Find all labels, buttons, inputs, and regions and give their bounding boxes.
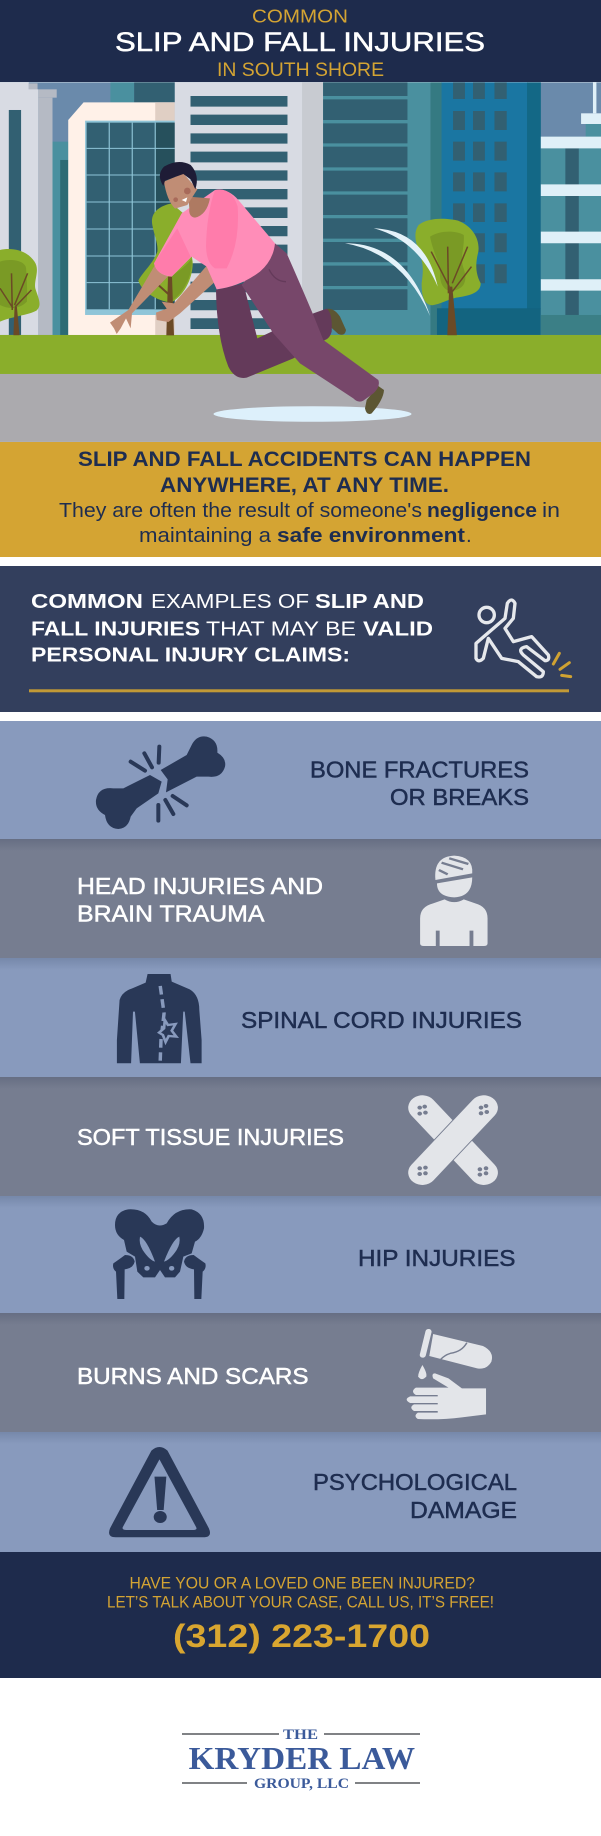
intro heading	[78, 448, 531, 497]
label: PSYCHOLOGICAL	[313, 1469, 517, 1495]
subheading text: EXAMPLES OF	[151, 591, 309, 613]
puddle	[214, 406, 412, 422]
band: hip injuries	[0, 1196, 601, 1313]
call to action text: LET’S TALK ABOUT YOUR CASE, CALL US, IT’S FREE!	[107, 1594, 494, 1612]
subheading text: PERSONAL INJURY CLAIMS:	[31, 645, 350, 667]
pocket	[269, 269, 286, 282]
icon: pelvis	[113, 1209, 206, 1299]
shirt	[154, 190, 275, 289]
sleeve shading	[154, 190, 238, 276]
tree: left	[0, 249, 40, 335]
label: DAMAGE	[410, 1497, 517, 1523]
intro body text: maintaining a	[139, 524, 272, 547]
subheading text	[31, 591, 433, 667]
intro heading: ANYWHERE, AT ANY TIME.	[160, 474, 449, 497]
subheading text: VALID	[363, 619, 433, 641]
band: head injuries	[0, 839, 601, 958]
subheading text: FALL INJURIES	[31, 619, 200, 641]
subheading text: THAT MAY BE	[206, 619, 356, 641]
label: OR BREAKS	[390, 784, 529, 810]
band: psychological damage	[0, 1432, 601, 1552]
intro heading: SLIP AND FALL ACCIDENTS CAN HAPPEN	[78, 448, 531, 471]
label: SOFT TISSUE INJURIES	[77, 1124, 344, 1150]
label: BURNS AND SCARS	[77, 1363, 308, 1389]
title: in south shore: IN SOUTH SHORE	[217, 60, 384, 81]
hair	[160, 162, 197, 189]
icon: crossed bandages	[417, 1104, 489, 1177]
neck	[188, 197, 210, 218]
phone number: (312) 223-1700	[173, 1618, 430, 1654]
label	[310, 757, 529, 810]
back arm	[110, 265, 169, 334]
intro body text: .	[466, 524, 472, 547]
label: SPINAL CORD INJURIES	[241, 1007, 522, 1033]
ground	[0, 335, 601, 442]
front arm	[156, 265, 227, 322]
city background	[0, 82, 601, 336]
logo: the kryder law group: THE	[283, 1727, 318, 1743]
logo: the kryder law group: GROUP, LLC	[254, 1776, 349, 1792]
call to action text: HAVE YOU OR A LOVED ONE BEEN INJURED?	[130, 1575, 475, 1593]
header banner	[0, 0, 601, 82]
logo: the kryder law group	[182, 1727, 420, 1792]
label	[313, 1469, 517, 1523]
subheading text: SLIP AND	[315, 591, 424, 613]
label	[77, 873, 323, 927]
navy subheading panel	[0, 566, 601, 712]
icon: warning triangle	[109, 1447, 210, 1537]
label: BRAIN TRAUMA	[77, 901, 265, 927]
icon: broken bone	[96, 736, 225, 829]
icon: slipping person	[476, 600, 571, 677]
footer call to action	[0, 1552, 601, 1678]
motion swoosh marks	[345, 228, 438, 316]
label: BONE FRACTURES	[310, 757, 529, 783]
gold intro panel	[0, 442, 601, 557]
tree: center	[138, 203, 193, 335]
intro body text: in	[542, 499, 560, 522]
falling man	[110, 162, 384, 414]
band: spinal cord injuries	[0, 958, 601, 1077]
intro body text: negligence	[427, 499, 537, 522]
back foot	[325, 309, 346, 335]
band: bone fractures	[0, 721, 601, 839]
front foot	[365, 386, 384, 414]
intro body text: safe environment	[277, 524, 465, 547]
label: HEAD INJURIES AND	[77, 873, 323, 899]
tree: right	[415, 219, 481, 335]
title: common: COMMON	[252, 6, 348, 27]
subheading text: COMMON	[31, 591, 143, 613]
label: HIP INJURIES	[358, 1245, 516, 1271]
face	[164, 173, 197, 209]
call to action text	[107, 1575, 494, 1612]
icon: chemical on hand	[407, 1332, 492, 1419]
logo: the kryder law group: KRYDER LAW	[189, 1740, 415, 1776]
title: slip and fall injuries: SLIP AND FALL INJURIES	[115, 27, 485, 57]
icon: bandaged head	[420, 856, 488, 946]
icon: spine on back	[117, 974, 202, 1063]
intro body text: They are often the result of someone's	[59, 499, 422, 522]
band: soft tissue injuries	[0, 1077, 601, 1196]
front leg	[242, 243, 379, 402]
band: burns and scars	[0, 1313, 601, 1432]
illustration: city street scene with falling man	[0, 82, 601, 442]
intro body text	[59, 499, 560, 547]
back leg	[216, 283, 332, 378]
